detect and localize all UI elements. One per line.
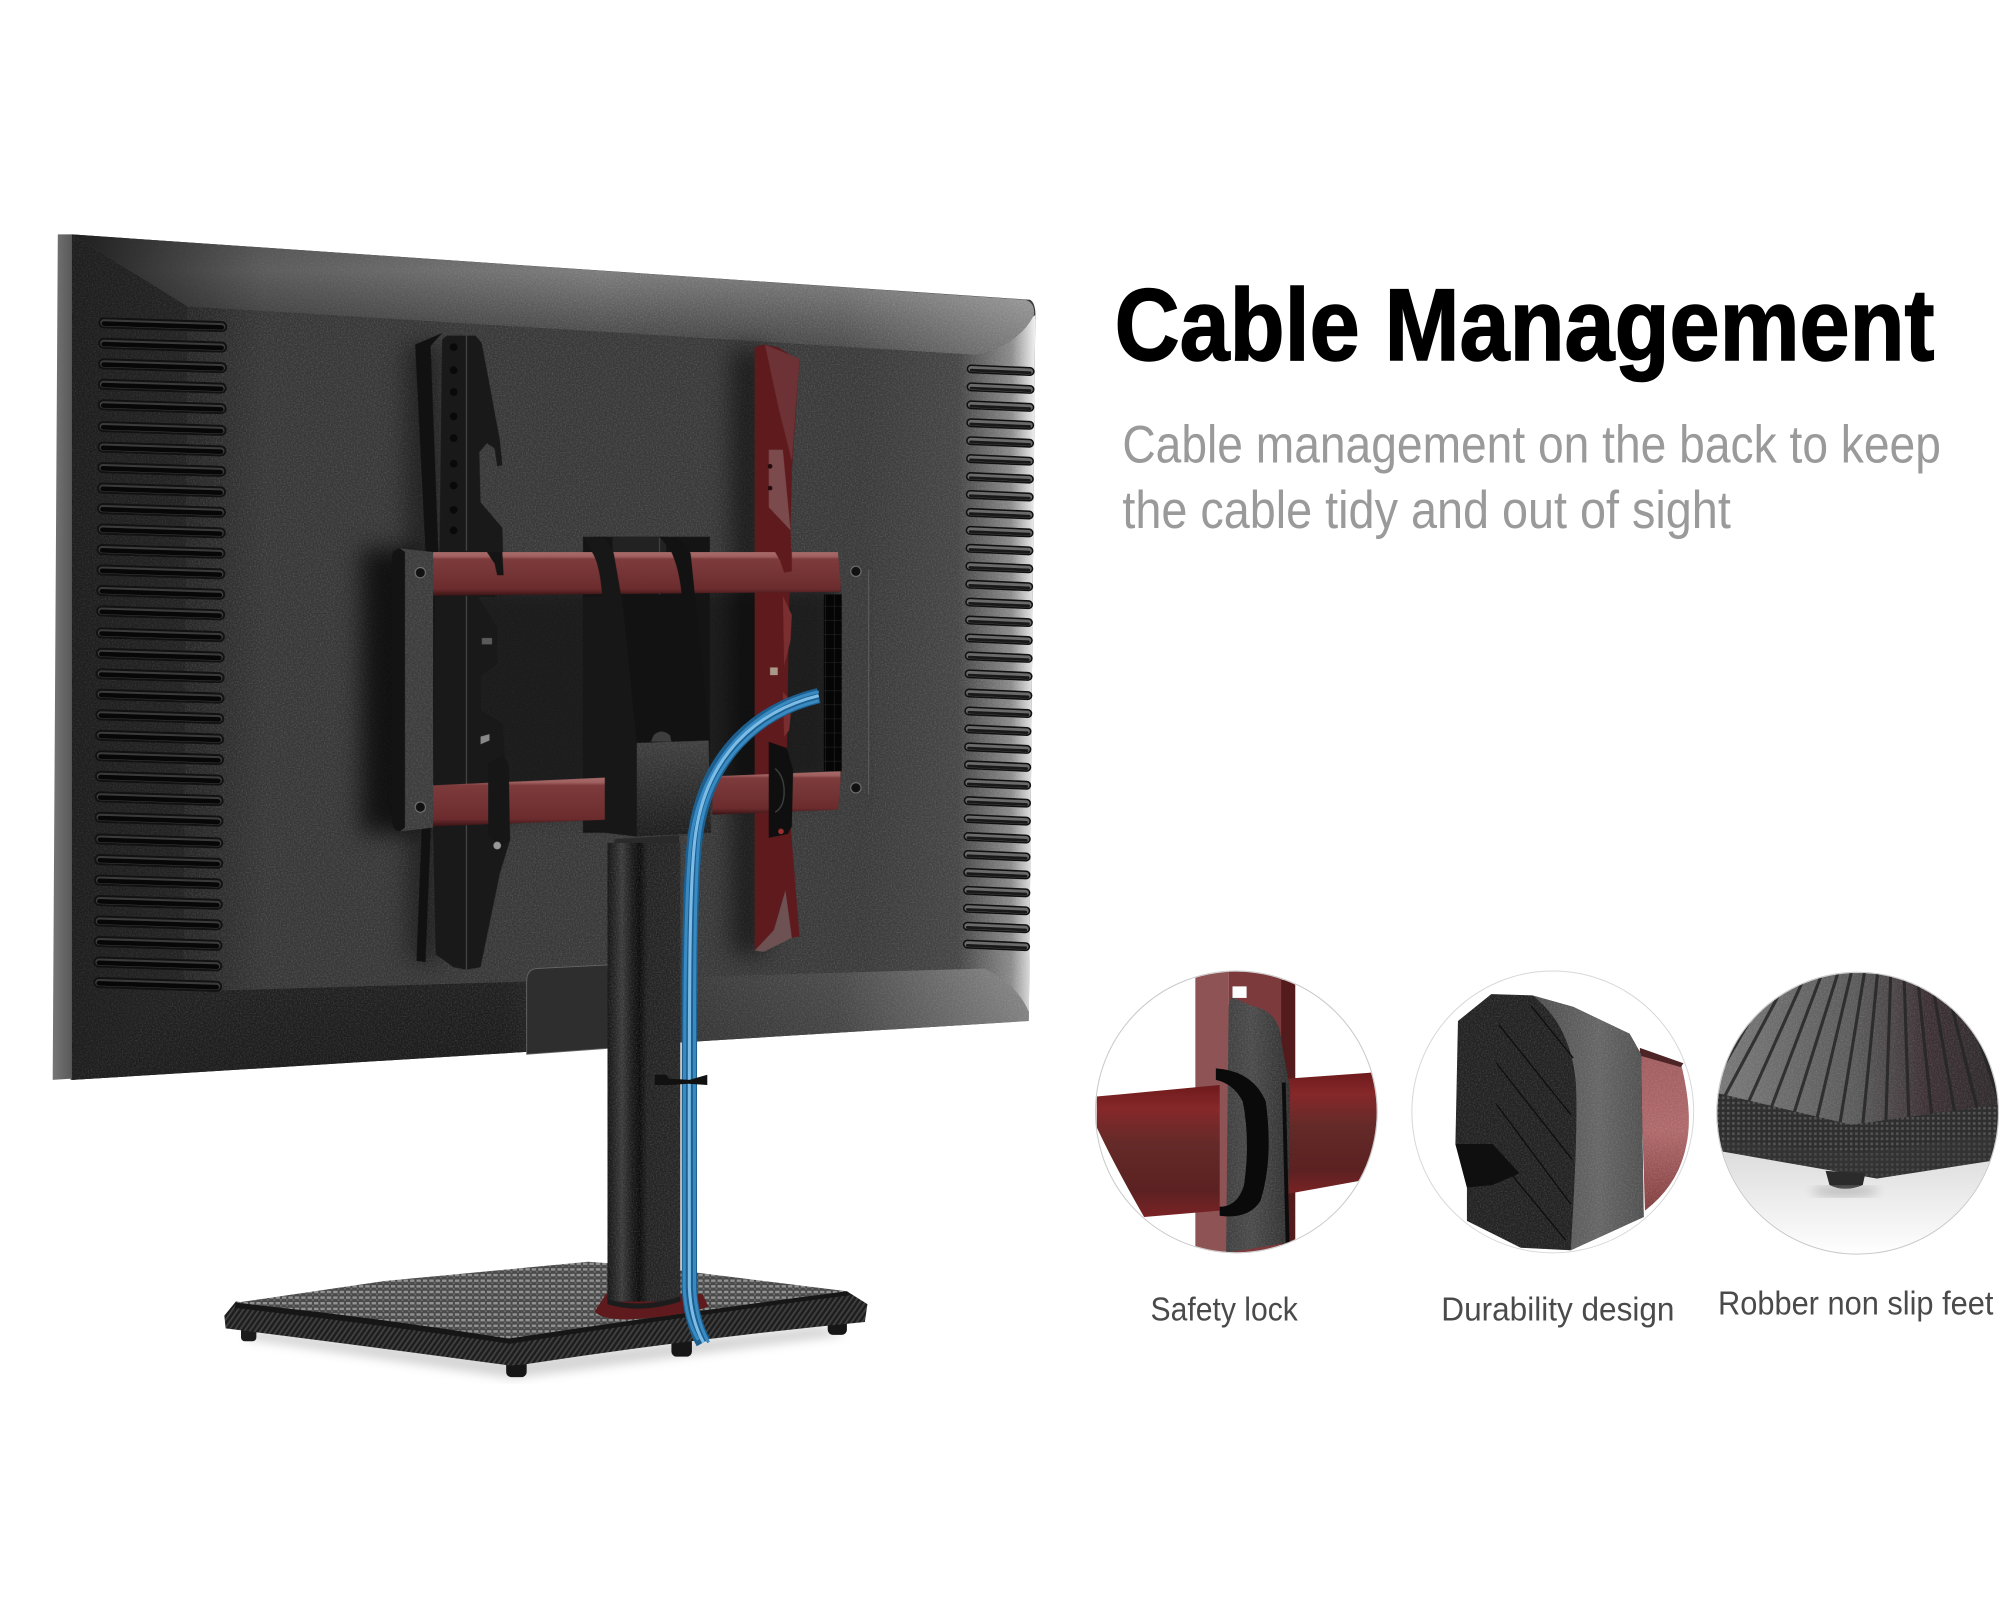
detail circle: rubber non slip feet	[1710, 961, 2000, 1255]
caption: durability design: Durability design	[1441, 1292, 1674, 1329]
stand pole	[607, 843, 680, 1309]
lower crossbar right	[712, 742, 841, 838]
rubber feet	[241, 1316, 847, 1377]
monitor back with stand	[53, 234, 1035, 1378]
detail circle: safety lock	[1095, 967, 1377, 1255]
mount cast shadow	[361, 343, 839, 961]
arm lower triangle	[755, 890, 792, 952]
side edge of the monitor	[53, 234, 72, 1080]
head block	[612, 740, 711, 848]
arm window	[769, 450, 791, 530]
left bezel shade	[72, 234, 187, 1080]
cable tie clip	[655, 1075, 707, 1085]
monitor housing	[53, 234, 1035, 1080]
description text	[1122, 415, 1941, 540]
right vent slats	[967, 369, 1030, 948]
central hanger body	[583, 537, 710, 833]
upper crossbar	[433, 552, 841, 596]
arm upper inner face	[765, 345, 800, 461]
arm body	[755, 345, 800, 951]
right crossbar end bracket	[824, 548, 874, 815]
stand base shadow	[244, 1326, 846, 1378]
arm plate	[433, 336, 510, 970]
black VESA arm	[415, 333, 510, 970]
lower crossbar left	[433, 756, 605, 849]
red VESA arm	[755, 345, 800, 952]
left crossbar end bracket	[392, 548, 433, 831]
detail circle: durability design	[1412, 971, 1694, 1253]
blue cables	[684, 692, 819, 1343]
hanger straps	[583, 537, 710, 837]
bottom bezel band	[72, 968, 1029, 1080]
caption: safety lock: Safety lock	[1151, 1292, 1298, 1329]
neck notch	[527, 965, 615, 1054]
top bezel band	[72, 234, 1034, 355]
carbon stand base	[224, 1262, 867, 1366]
inner back panel	[72, 234, 1035, 1080]
description text: the cable tidy and out of sight	[1122, 481, 1731, 540]
arm rail	[415, 333, 442, 962]
left vent slats	[99, 323, 222, 987]
red pole collar	[595, 1294, 709, 1319]
